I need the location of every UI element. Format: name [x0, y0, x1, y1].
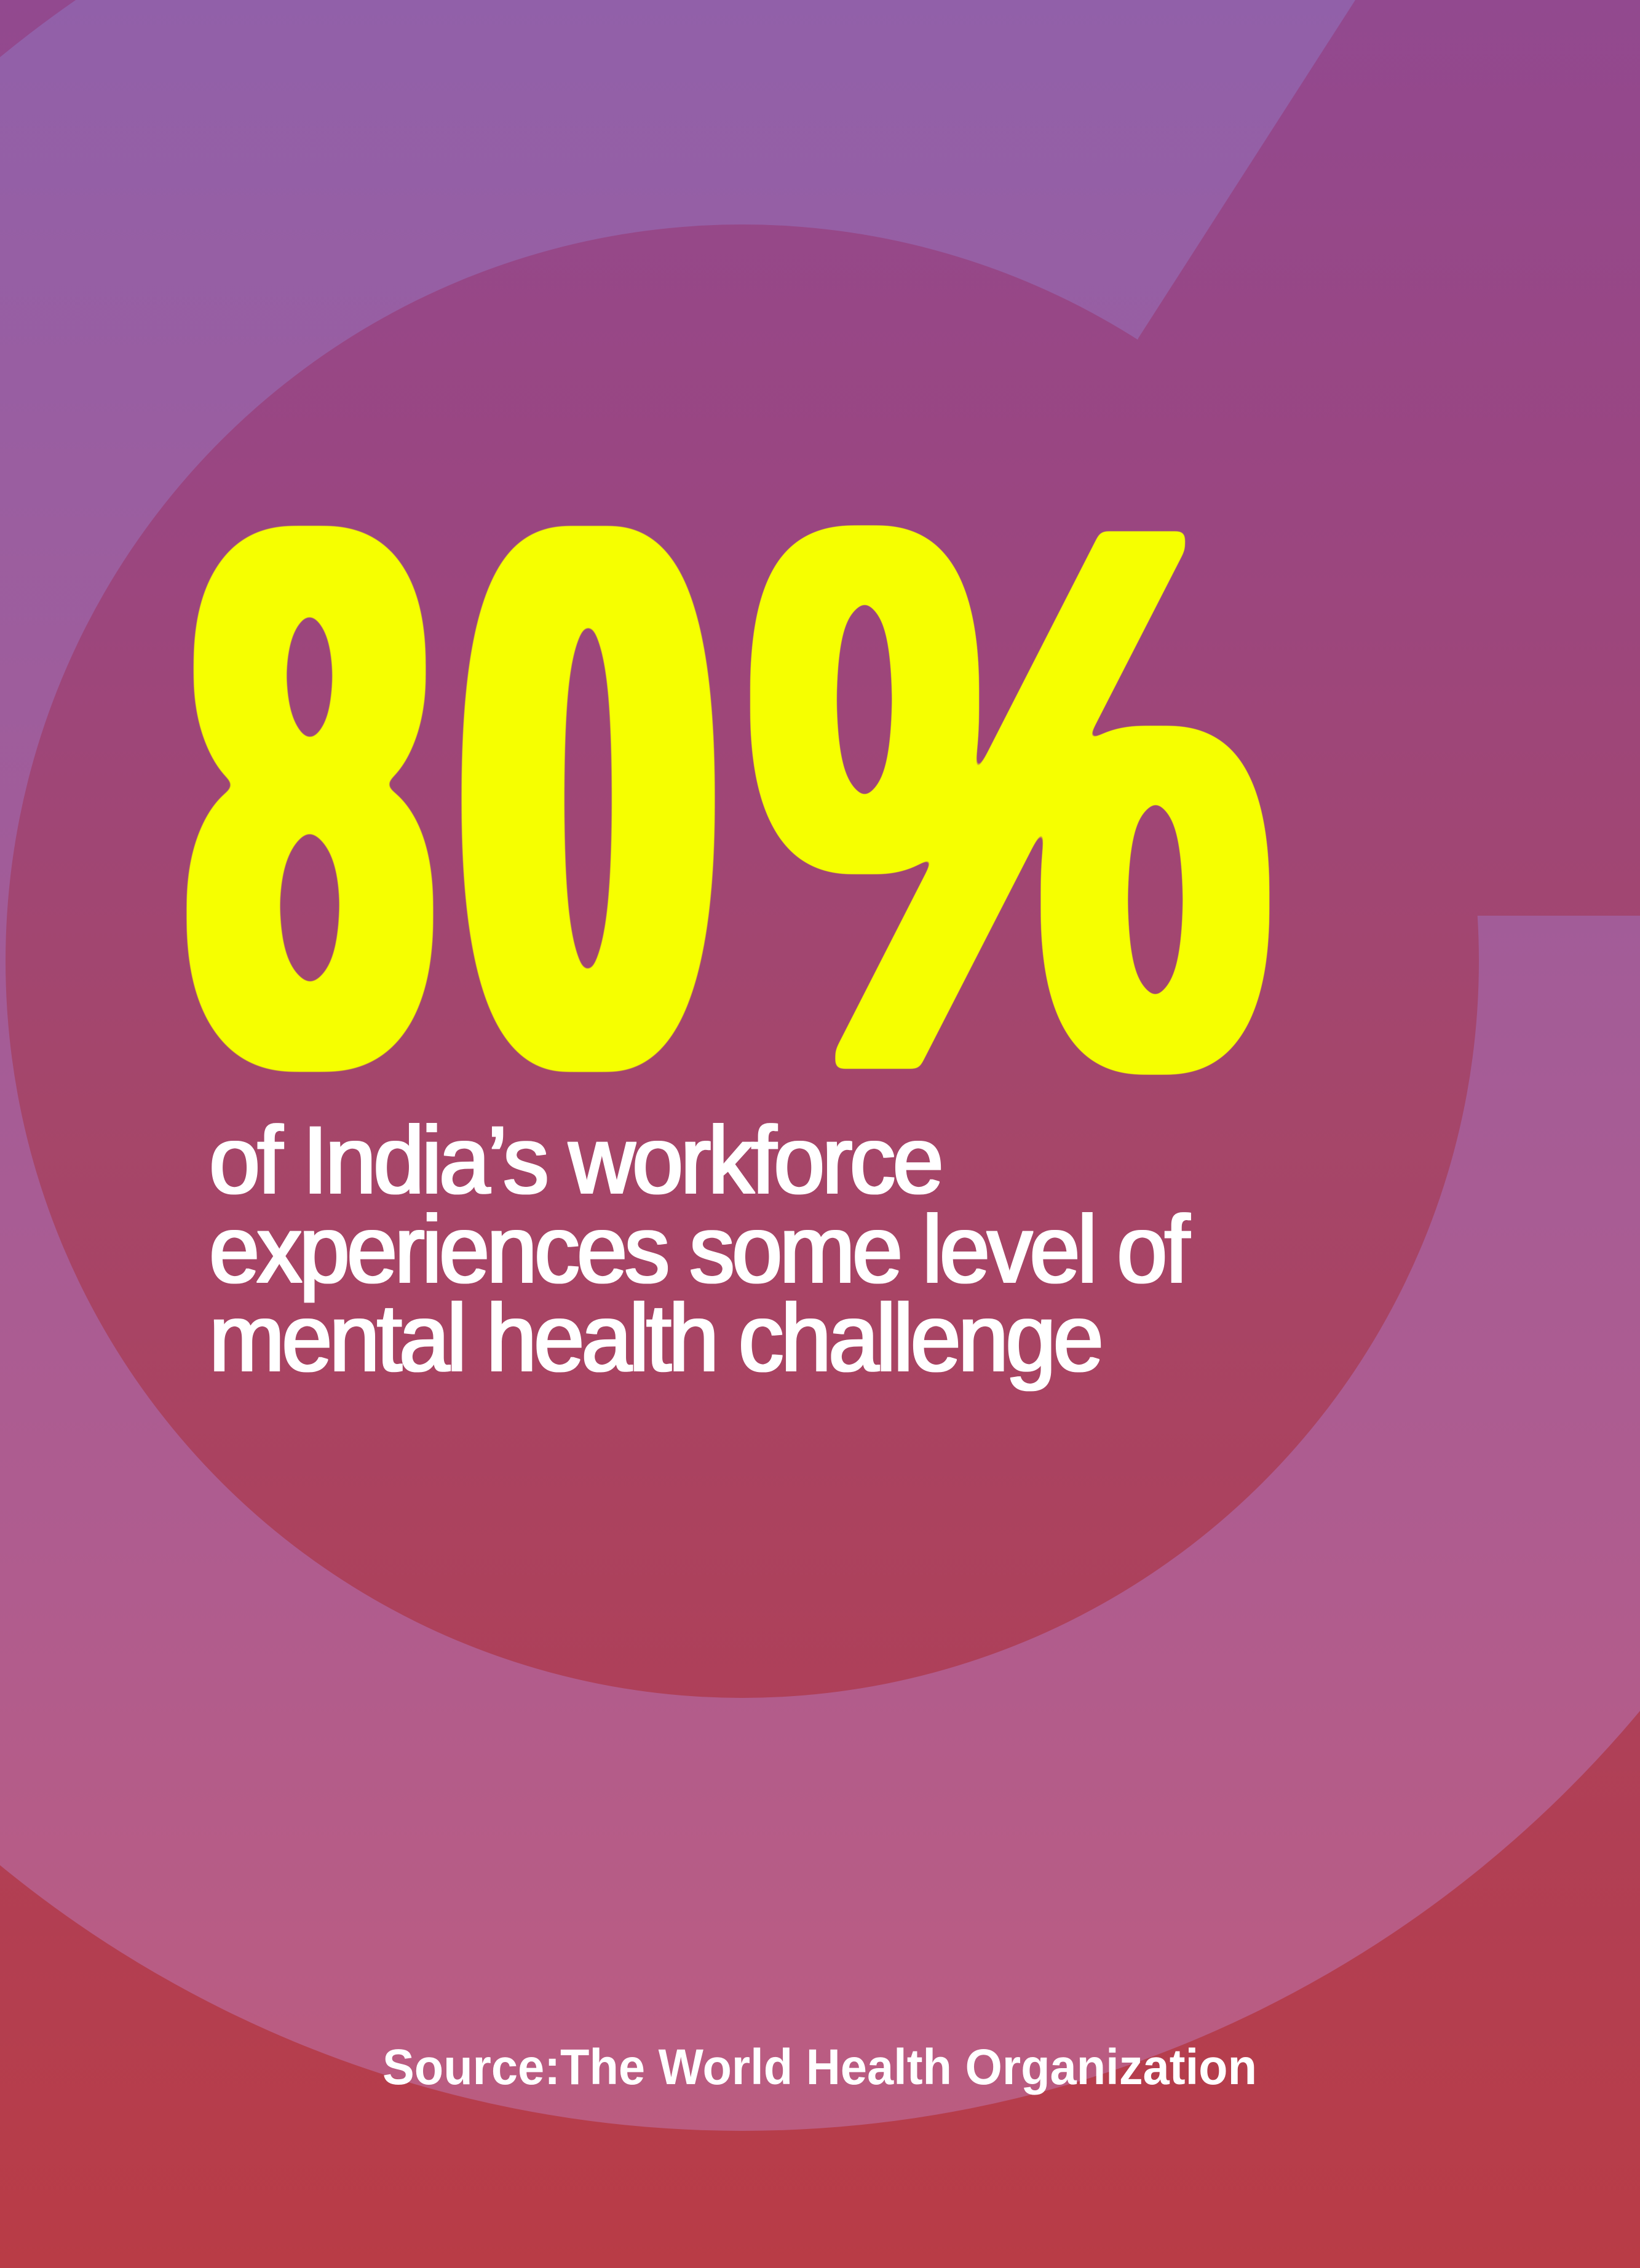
percent sign: %	[748, 378, 1273, 1220]
source line: Source:The World Health Organization	[382, 2039, 1257, 2095]
digit 8: 8	[189, 376, 430, 1219]
description text	[209, 1107, 1190, 1392]
line 3: mental health challenge	[209, 1285, 1101, 1392]
digit 0: 0	[465, 371, 712, 1224]
headline statistic: 80%	[189, 371, 1273, 1224]
line 2: experiences some level of	[209, 1196, 1190, 1303]
line 1: of India’s workforce	[209, 1107, 941, 1214]
